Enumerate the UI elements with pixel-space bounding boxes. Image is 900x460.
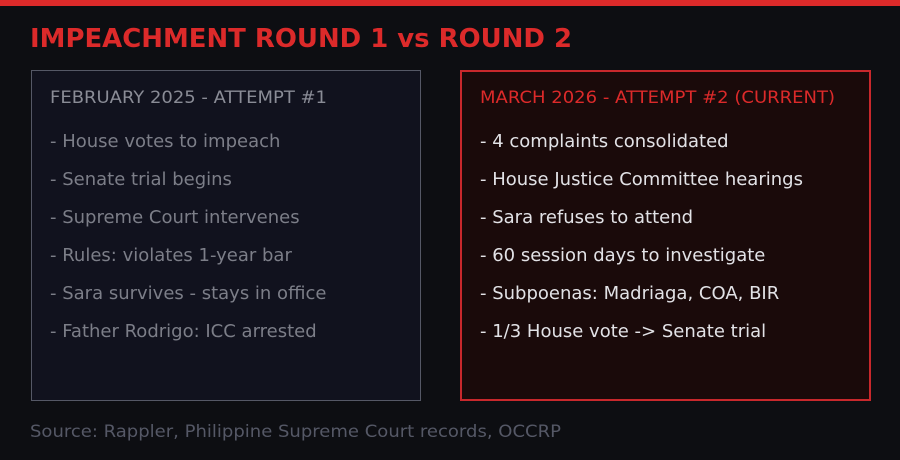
panel: attempt 1	[32, 70, 420, 400]
panel heading: attempt 1: FEBRUARY 2025 - ATTEMPT #1	[50, 88, 327, 108]
top accent bar	[0, 0, 900, 6]
title: IMPEACHMENT ROUND 1 vs ROUND 2	[30, 24, 572, 54]
list: attempt 2 events: - 4 complaints consolidated	[480, 131, 729, 152]
list: attempt 1 events: - Rules: violates 1-year bar	[50, 245, 292, 266]
list: attempt 1 events: - Father Rodrigo: ICC arrested	[50, 321, 317, 342]
list: attempt 2 events: - 1/3 House vote -> Senate trial	[480, 321, 766, 342]
list: attempt 2 events: - Subpoenas: Madriaga, COA, BIR	[480, 283, 779, 304]
list: attempt 1 events	[50, 131, 326, 342]
source note: Source: Rappler, Philippine Supreme Court records, OCCRP	[30, 422, 561, 442]
list: attempt 1 events: - Senate trial begins	[50, 169, 232, 190]
list: attempt 1 events: - House votes to impeach	[50, 131, 280, 152]
list: attempt 1 events: - Supreme Court intervenes	[50, 207, 300, 228]
list: attempt 2 events: - Sara refuses to attend	[480, 207, 693, 228]
list: attempt 1 events: - Sara survives - stays in office	[50, 283, 326, 304]
list: attempt 2 events	[480, 131, 803, 342]
list: attempt 2 events: - House Justice Committee hearings	[480, 169, 803, 190]
panel heading: attempt 2: MARCH 2026 - ATTEMPT #2 (CURRENT)	[480, 88, 835, 108]
list: attempt 2 events: - 60 session days to investigate	[480, 245, 765, 266]
panel: attempt 2	[461, 71, 870, 400]
